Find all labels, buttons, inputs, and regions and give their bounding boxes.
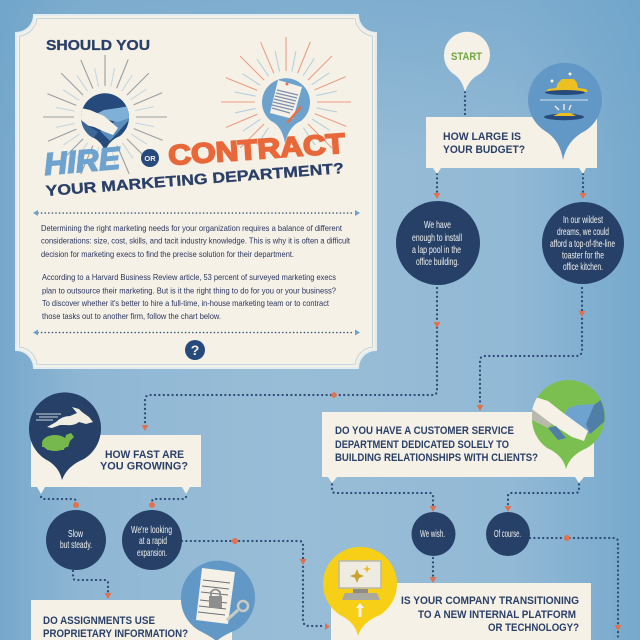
answer: we wish: We wish. — [420, 528, 445, 540]
heading: hire or contract — [43, 128, 346, 182]
icon: contract document with rays — [221, 37, 351, 148]
question: budget: HOW LARGE IS — [443, 131, 521, 143]
answer: toaster: In our wildest — [563, 214, 603, 226]
answer: toaster — [542, 202, 624, 284]
question: proprietary — [43, 615, 188, 640]
panel: customer service question — [322, 380, 606, 483]
answer: lap pool: enough to install — [412, 232, 462, 244]
panel: proprietary question — [31, 561, 255, 640]
question: proprietary: DO ASSIGNMENTS USE — [43, 615, 155, 627]
question: growth: HOW FAST ARE — [105, 449, 184, 461]
flow arrow markers — [73, 193, 622, 631]
answer: toaster: office kitchen. — [563, 261, 603, 273]
text block: intro paragraph one: Determining the right marketing needs for your organization requires a balance of different — [41, 223, 343, 233]
icon: budget pin with gold — [528, 63, 602, 160]
icon: start pin: START — [451, 51, 482, 63]
answer: rapid expansion — [122, 510, 182, 570]
icon: rabbit and turtle pin — [29, 392, 101, 480]
answer: slow but steady: but steady. — [60, 539, 92, 551]
answer: rapid expansion: We're looking — [131, 524, 172, 536]
answer: we wish — [412, 512, 456, 556]
text block: intro paragraph one: considerations: size, cost, skills, and tacit industry knowledge. This is why it is often a difficult — [41, 236, 351, 246]
answer: slow but steady — [46, 510, 106, 570]
question: budget: YOUR BUDGET? — [443, 144, 525, 156]
answer: of course: Of course. — [494, 528, 521, 540]
question: customer service — [335, 425, 538, 464]
panel: budget question — [426, 63, 602, 174]
text block: intro paragraph two — [42, 272, 336, 321]
question: growth — [100, 449, 188, 472]
question: growth: YOU GROWING? — [100, 460, 188, 472]
question: customer service: DO YOU HAVE A CUSTOMER SERVICE — [335, 425, 514, 437]
question: customer service: DEPARTMENT DEDICATED SOLELY TO — [335, 439, 509, 451]
heading: your marketing department: YOUR MARKETING DEPARTMENT? — [45, 160, 344, 200]
question: proprietary: PROPRIETARY INFORMATION? — [43, 628, 188, 640]
answer: lap pool: office building. — [416, 256, 459, 268]
question: platform: OR TECHNOLOGY? — [488, 622, 579, 634]
question: platform — [401, 595, 579, 634]
panel: growth question — [29, 392, 201, 494]
panel: platform question — [323, 547, 591, 640]
text block: intro paragraph two: According to a Harvard Business Review article, 53 percent of surveyed marketing execs — [42, 272, 336, 282]
answer: lap pool — [396, 201, 480, 285]
question: platform: IS YOUR COMPANY TRANSITIONING — [401, 595, 579, 607]
flow connectors — [41, 92, 618, 640]
icon: question mark — [185, 340, 205, 360]
heading: hire or contract: CONTRACT — [167, 128, 346, 171]
answer: toaster: toaster for the — [562, 250, 604, 262]
answer: rapid expansion: expansion. — [137, 547, 167, 559]
icon: locked document pin — [181, 561, 255, 640]
answer: lap pool: We have — [424, 219, 451, 231]
answer: slow but steady: Slow — [68, 528, 83, 540]
icon: question mark: ? — [191, 342, 199, 358]
icon: green handshake pin — [532, 380, 606, 469]
text block: intro paragraph two: those tasks out to another firm, follow the chart below. — [42, 311, 221, 321]
answer: of course — [486, 512, 530, 556]
heading: hire or contract: HIRE — [43, 140, 123, 182]
text block: intro paragraph two: To discover whether it's better to hire a full-time, in-house marketing team or to contract — [42, 298, 330, 308]
heading: should you: SHOULD YOU — [46, 38, 150, 54]
divider arrows bottom — [33, 330, 360, 336]
answer: toaster: dreams, we could — [557, 226, 609, 238]
answer: rapid expansion: at a rapid — [139, 535, 167, 547]
question: budget — [443, 131, 525, 156]
divider arrows top — [33, 210, 360, 216]
panel: intro — [16, 15, 376, 368]
icon: start pin — [444, 32, 490, 92]
question: customer service: BUILDING RELATIONSHIPS WITH CLIENTS? — [335, 452, 538, 464]
text block: intro paragraph two: plan to outsource their marketing. But is it the right thing to do for you or your business? — [42, 286, 336, 296]
answer: lap pool: a lap pool in the — [412, 244, 461, 256]
text block: intro paragraph one — [41, 223, 351, 259]
question: platform: TO A NEW INTERNAL PLATFORM — [418, 609, 576, 621]
heading: hire or contract: OR — [144, 154, 156, 163]
text block: intro paragraph one: decision for marketing execs to find the precise solution for their department. — [41, 249, 294, 259]
icon: yellow computer pin — [323, 547, 397, 636]
icon: hire handshake with rays — [43, 55, 167, 174]
